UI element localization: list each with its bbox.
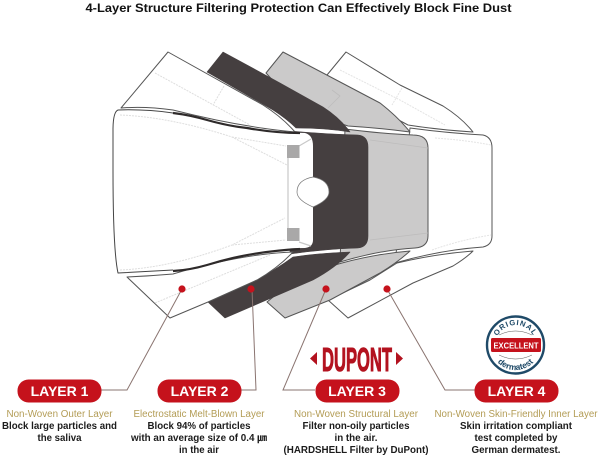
layer 1: outer white sheet bbox=[113, 52, 313, 318]
dot: layer 2 bbox=[247, 285, 255, 293]
caption: layer 1: the saliva bbox=[38, 433, 82, 444]
caption: layer 3: Filter non-oily particles bbox=[302, 421, 410, 432]
leader line: layer 4 bbox=[387, 289, 475, 390]
caption: layer 1: Non-Woven Outer Layer bbox=[6, 409, 113, 420]
caption: layer 2: Electrostatic Melt-Blown Layer bbox=[134, 409, 265, 420]
dermatest badge: ORIGINAL bbox=[494, 320, 536, 336]
dot: layer 4 bbox=[383, 285, 391, 293]
dupont logo: DUPONT bbox=[322, 342, 392, 378]
mask diagram bbox=[113, 52, 492, 318]
grey clip upper bbox=[287, 145, 300, 158]
dot: layer 1 bbox=[178, 285, 186, 293]
leader line: layer 2 bbox=[241, 289, 256, 390]
caption: layer 4: Skin irritation compliant bbox=[460, 421, 573, 432]
caption: layer 3: Non-Woven Structural Layer bbox=[294, 409, 419, 420]
caption: layer 1 bbox=[2, 409, 117, 444]
caption: layer 3: (HARDSHELL Filter by DuPont) bbox=[284, 445, 428, 456]
caption: layer 4 bbox=[434, 409, 598, 456]
panel: layer 4 bbox=[434, 380, 598, 456]
nose bridge lines and nose opening bbox=[288, 139, 329, 246]
pill: layer 3 bbox=[316, 380, 400, 402]
caption: layer 4: Non-Woven Skin-Friendly Inner Layer bbox=[434, 409, 598, 420]
caption: layer 4: German dermatest. bbox=[472, 445, 561, 456]
caption: layer 2: in the air bbox=[179, 445, 219, 456]
caption: layer 2 bbox=[130, 409, 267, 456]
panel: layer 2 bbox=[130, 380, 267, 456]
dermatest badge bbox=[486, 315, 546, 375]
caption: layer 4: test completed by bbox=[474, 433, 558, 444]
leader line: layer 1 bbox=[101, 289, 182, 390]
pill: layer 4 bbox=[474, 380, 558, 402]
caption: layer 2: Block 94% of particles bbox=[148, 421, 251, 432]
dot: layer 3 bbox=[322, 285, 330, 293]
caption: layer 2: with an average size of 0.4 ㎛ bbox=[130, 433, 267, 444]
caption: layer 3: in the air. bbox=[334, 433, 378, 444]
caption: layer 3 bbox=[284, 409, 428, 456]
layer 2: dark sheet bbox=[207, 52, 368, 318]
pill: layer 2: LAYER 2 bbox=[171, 383, 229, 399]
dermatest badge: EXCELLENT bbox=[494, 342, 539, 350]
layer 3: grey sheet bbox=[266, 52, 428, 318]
caption: layer 1: Block large particles and bbox=[2, 421, 117, 432]
grey clip lower bbox=[287, 228, 300, 241]
panel: layer 1 bbox=[2, 380, 117, 444]
dermatest badge: dermatest bbox=[498, 359, 534, 370]
pill: layer 4: LAYER 4 bbox=[488, 383, 546, 399]
title: 4-Layer Structure Filtering Protection Can Effectively Block Fine Dust bbox=[86, 2, 512, 15]
pill: layer 3: LAYER 3 bbox=[328, 383, 386, 399]
pill: layer 1: LAYER 1 bbox=[31, 383, 89, 399]
layer 4: inner mask sheet bbox=[327, 52, 492, 318]
leader line: layer 3 bbox=[283, 289, 326, 390]
panel: layer 3 bbox=[284, 380, 428, 456]
